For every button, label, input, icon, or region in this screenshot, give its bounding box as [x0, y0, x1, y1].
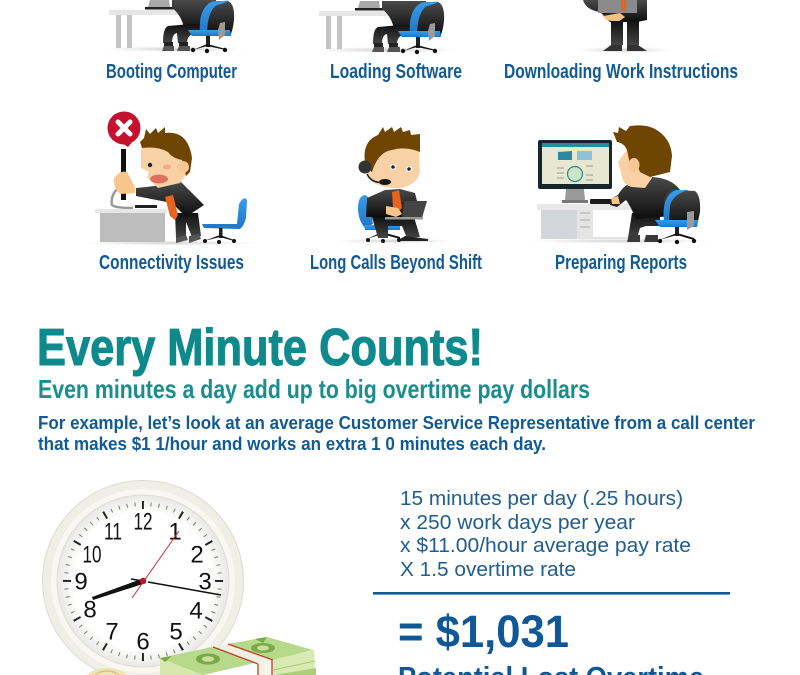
- illustration: downloading work instructions: [577, 0, 673, 54]
- label: loading software: Loading Software: [330, 61, 462, 83]
- icon: wall clock: 9: [74, 568, 88, 596]
- icon: money stack: [160, 637, 316, 675]
- icon: wall clock: 5: [169, 618, 183, 646]
- illustration: booting computer: [103, 0, 247, 53]
- panel: tasks illustrations: [80, 0, 738, 274]
- icon: wall clock: 2: [190, 542, 204, 568]
- icon: wall clock: 12: [134, 508, 152, 536]
- icon: wall clock: 4: [189, 598, 203, 624]
- icon: wall clock: 11: [104, 518, 122, 546]
- calculation text block: x $11.00/hour average pay rate: [400, 534, 691, 557]
- example text block: For example, let’s look at an average Customer Service Representative from a call center: [38, 413, 755, 433]
- icon: wall clock: 1: [168, 518, 182, 546]
- label: preparing reports: Preparing Reports: [555, 252, 687, 274]
- label: connectivity issues: Connectivity Issues: [99, 252, 244, 274]
- icon: coin: [86, 668, 128, 675]
- illustration: long calls beyond shift: [335, 127, 455, 244]
- calculation text block: 15 minutes per day (.25 hours): [400, 487, 683, 510]
- total amount: = $1,031: [398, 606, 569, 657]
- calculation text block: X 1.5 overtime rate: [400, 558, 576, 581]
- heading: Every Minute Counts!: [37, 319, 483, 377]
- subheading: Even minutes a day add up to big overtime pay dollars: [38, 374, 590, 404]
- label: long calls beyond shift: Long Calls Beyond Shift: [310, 252, 482, 274]
- divider rule: [373, 592, 730, 595]
- illustration: preparing reports: [525, 125, 715, 244]
- label: booting computer: Booting Computer: [106, 61, 237, 83]
- example text block: [38, 413, 755, 454]
- calculation text block: x 250 work days per year: [400, 511, 635, 534]
- example text block: that makes $1 1/hour and works an extra 1 0 minutes each day.: [38, 434, 546, 454]
- illustration: connectivity issues: [80, 112, 260, 246]
- icon: wall clock: 3: [198, 568, 212, 596]
- label: downloading work instructions: Downloading Work Instructions: [504, 61, 738, 83]
- icon: wall clock: [42, 480, 244, 675]
- icon: wall clock: 6: [136, 628, 150, 656]
- illustration: loading software: [313, 1, 457, 54]
- calculation text block: [400, 487, 691, 581]
- icon: wall clock: 7: [105, 618, 119, 646]
- icon: wall clock: 8: [83, 596, 97, 624]
- icon: wall clock: 10: [82, 542, 102, 568]
